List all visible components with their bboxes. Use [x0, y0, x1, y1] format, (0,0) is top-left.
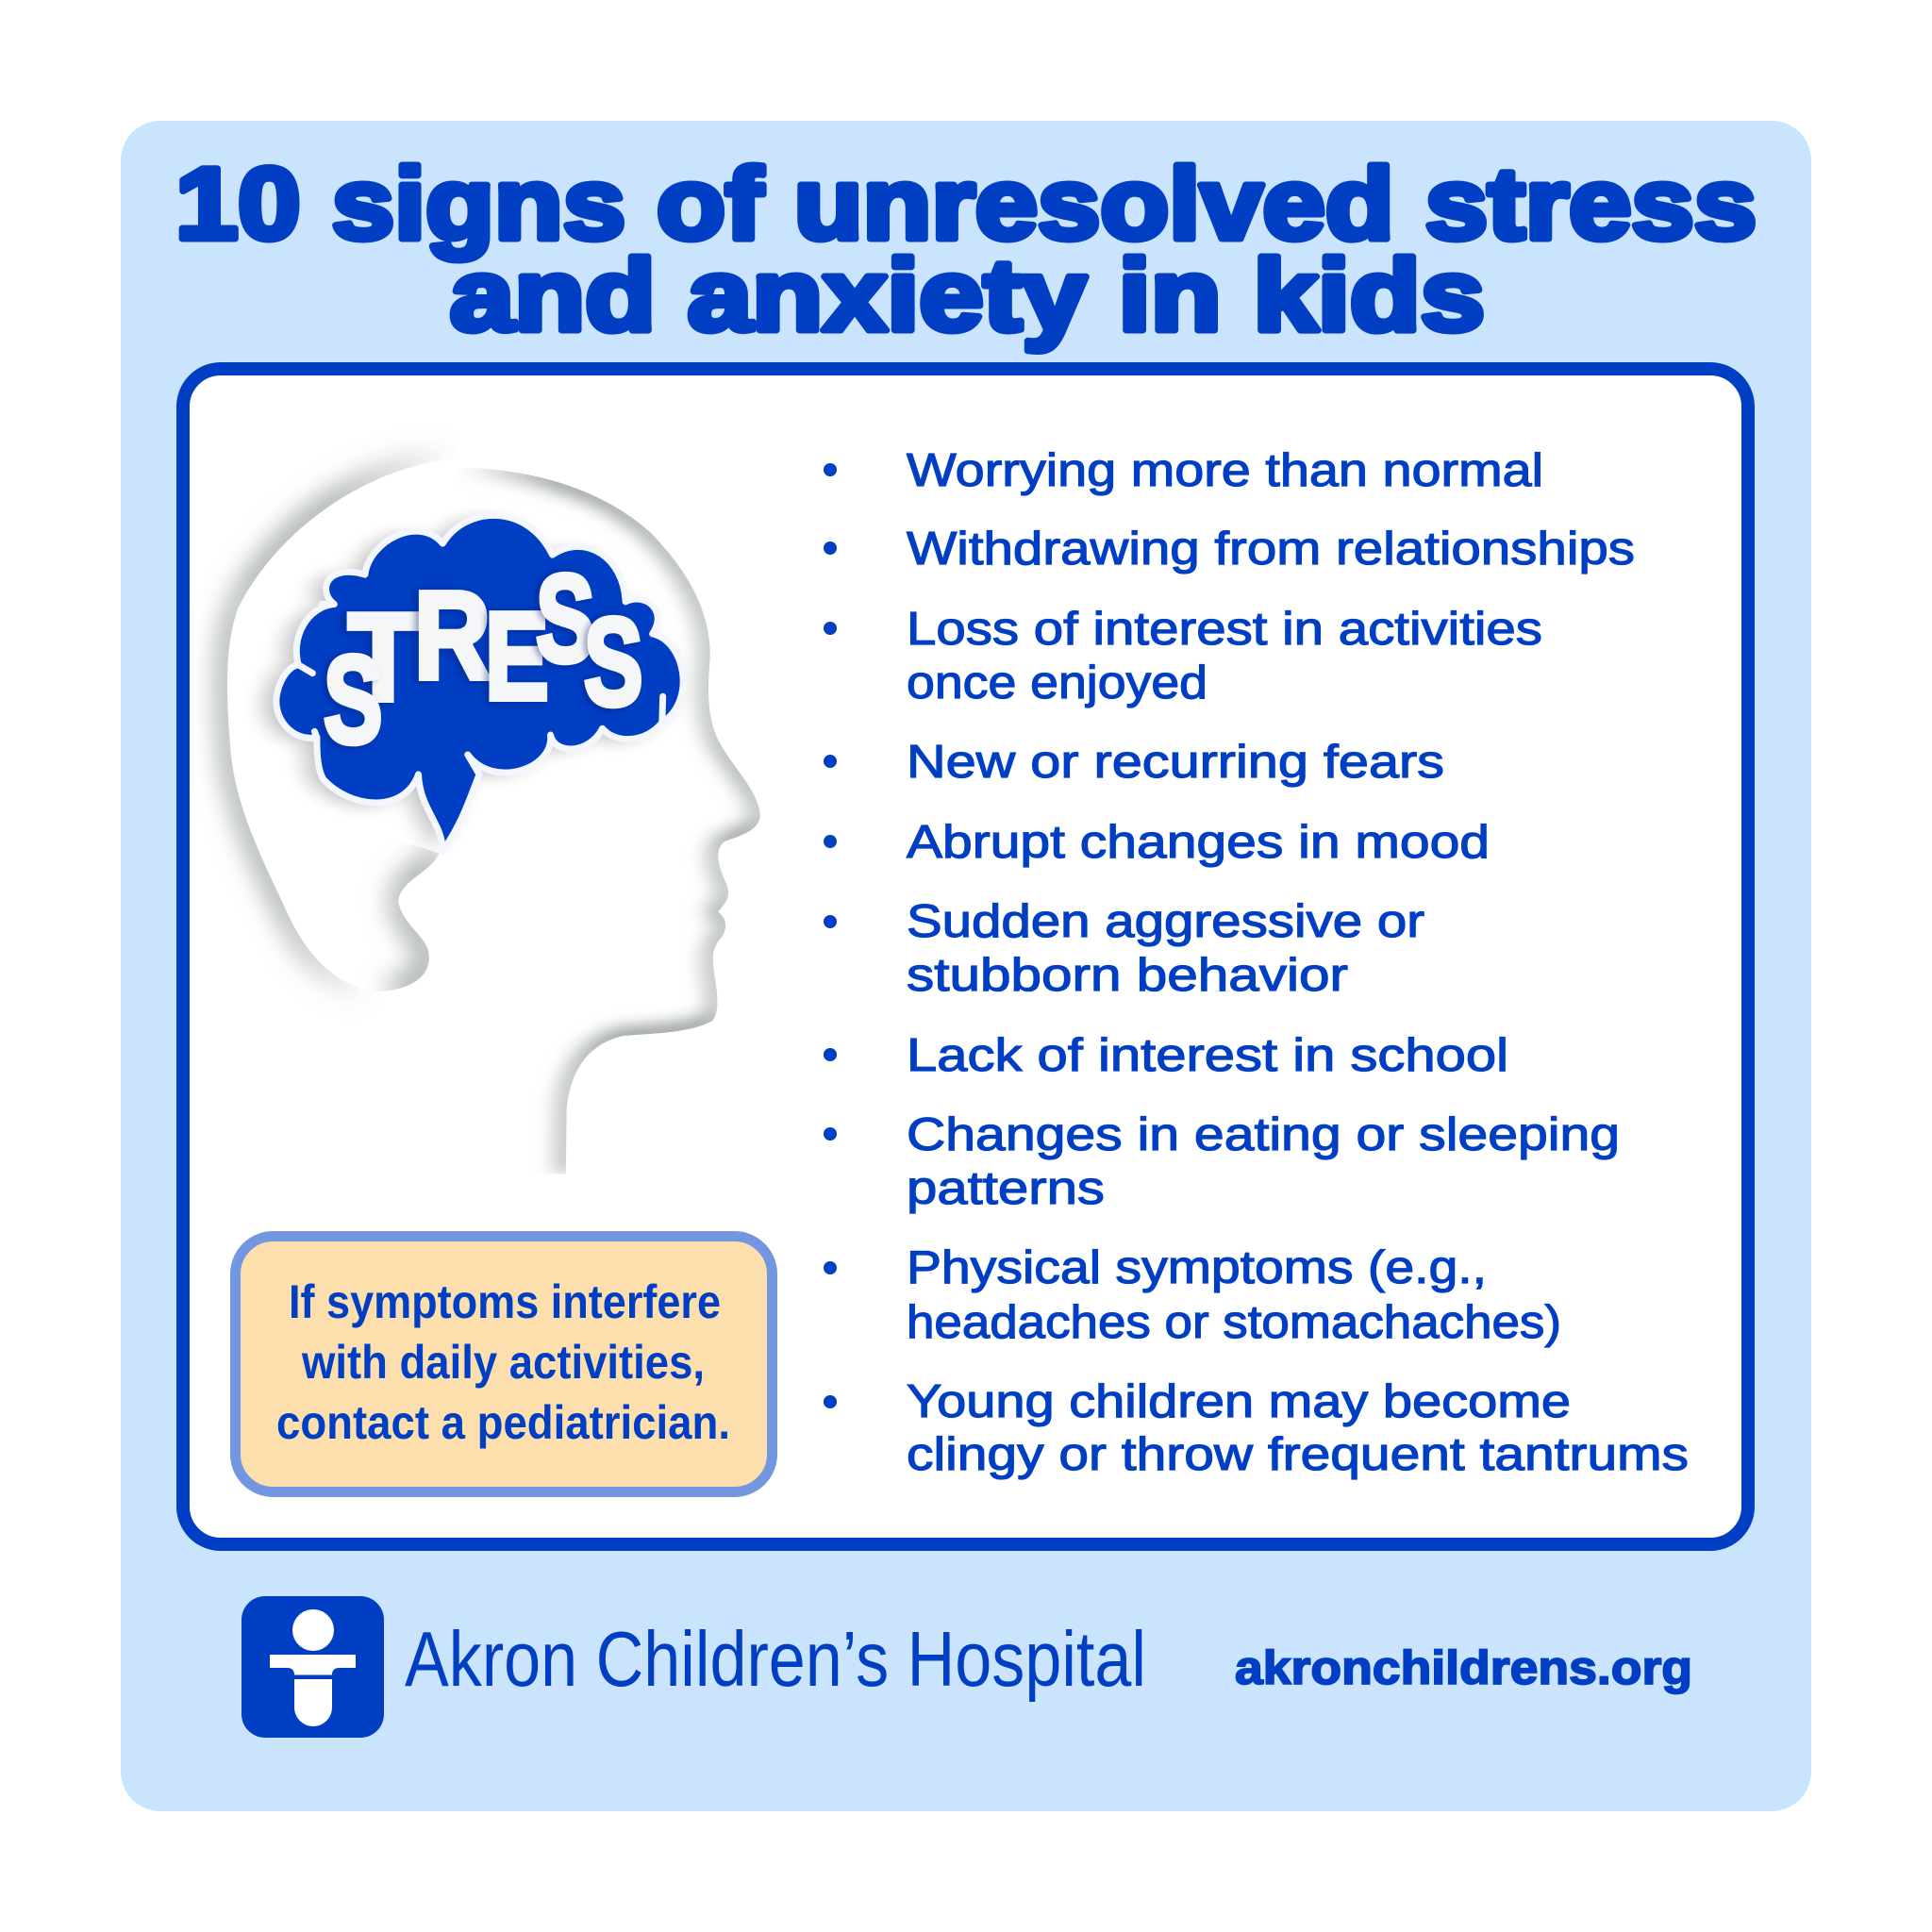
sign 7: Lack of interest in school [907, 1030, 1508, 1081]
head shadow: outer hair edge [227, 458, 458, 991]
sign 2: Withdrawing from relationships [907, 524, 1635, 575]
stress lettering: S [584, 592, 643, 732]
head shadow: hair curl edge [381, 854, 439, 991]
sign 6: Sudden aggressive or [907, 896, 1424, 947]
sign 3: Loss of interest in activities [907, 604, 1542, 655]
sign 10: Young children may become [907, 1376, 1571, 1427]
list: ten signs [824, 445, 1689, 1480]
stress lettering: S [536, 549, 595, 689]
sign 6: stubborn behavior [907, 950, 1348, 1001]
sign 9: Physical symptoms (e.g., [907, 1242, 1487, 1293]
sign 9 [824, 1242, 1561, 1348]
title [175, 146, 1757, 352]
stress lettering [324, 549, 643, 770]
sign 8: patterns [907, 1163, 1105, 1214]
cloud shadow [264, 518, 671, 854]
sign 3: once enjoyed [907, 658, 1208, 708]
sign 8 [824, 1109, 1620, 1214]
stress lettering: R [414, 565, 491, 705]
logo wordmark: Akron Children’s Hospital [405, 1615, 1146, 1703]
website url: akronchildrens.org [1235, 1641, 1692, 1694]
icon: hospital logo [242, 1596, 384, 1738]
title: 10 signs of unresolved stress [175, 146, 1757, 260]
stress lettering: T [348, 587, 418, 726]
sign 8: Changes in eating or sleeping [907, 1109, 1620, 1160]
callout: contact a pediatrician: If symptoms interfere [289, 1275, 721, 1328]
sign 5: Abrupt changes in mood [907, 817, 1490, 868]
sign 9: headaches or stomachaches) [907, 1297, 1561, 1348]
stress lettering: E [485, 586, 549, 725]
sign 6 [824, 896, 1424, 1001]
title: and anxiety in kids [450, 238, 1485, 352]
stress lettering: S [324, 630, 383, 770]
sign 1: Worrying more than normal [907, 445, 1543, 496]
illustration: head silhouette with stress cloud [227, 458, 760, 1174]
brain cloud [276, 515, 683, 851]
head shadow: face and neck edge [458, 468, 760, 1174]
sign 10: clingy or throw frequent tantrums [907, 1429, 1689, 1480]
callout: contact a pediatrician [236, 1236, 772, 1492]
callout: contact a pediatrician: contact a pediatrician. [276, 1396, 730, 1449]
background panel [121, 121, 1811, 1811]
sign 4: New or recurring fears [907, 737, 1444, 788]
panel: white framed content card [183, 369, 1748, 1544]
sign 10 [824, 1376, 1689, 1480]
sign 3 [824, 604, 1542, 708]
cloud notches [298, 604, 663, 738]
callout: contact a pediatrician: with daily activities, [301, 1336, 705, 1389]
